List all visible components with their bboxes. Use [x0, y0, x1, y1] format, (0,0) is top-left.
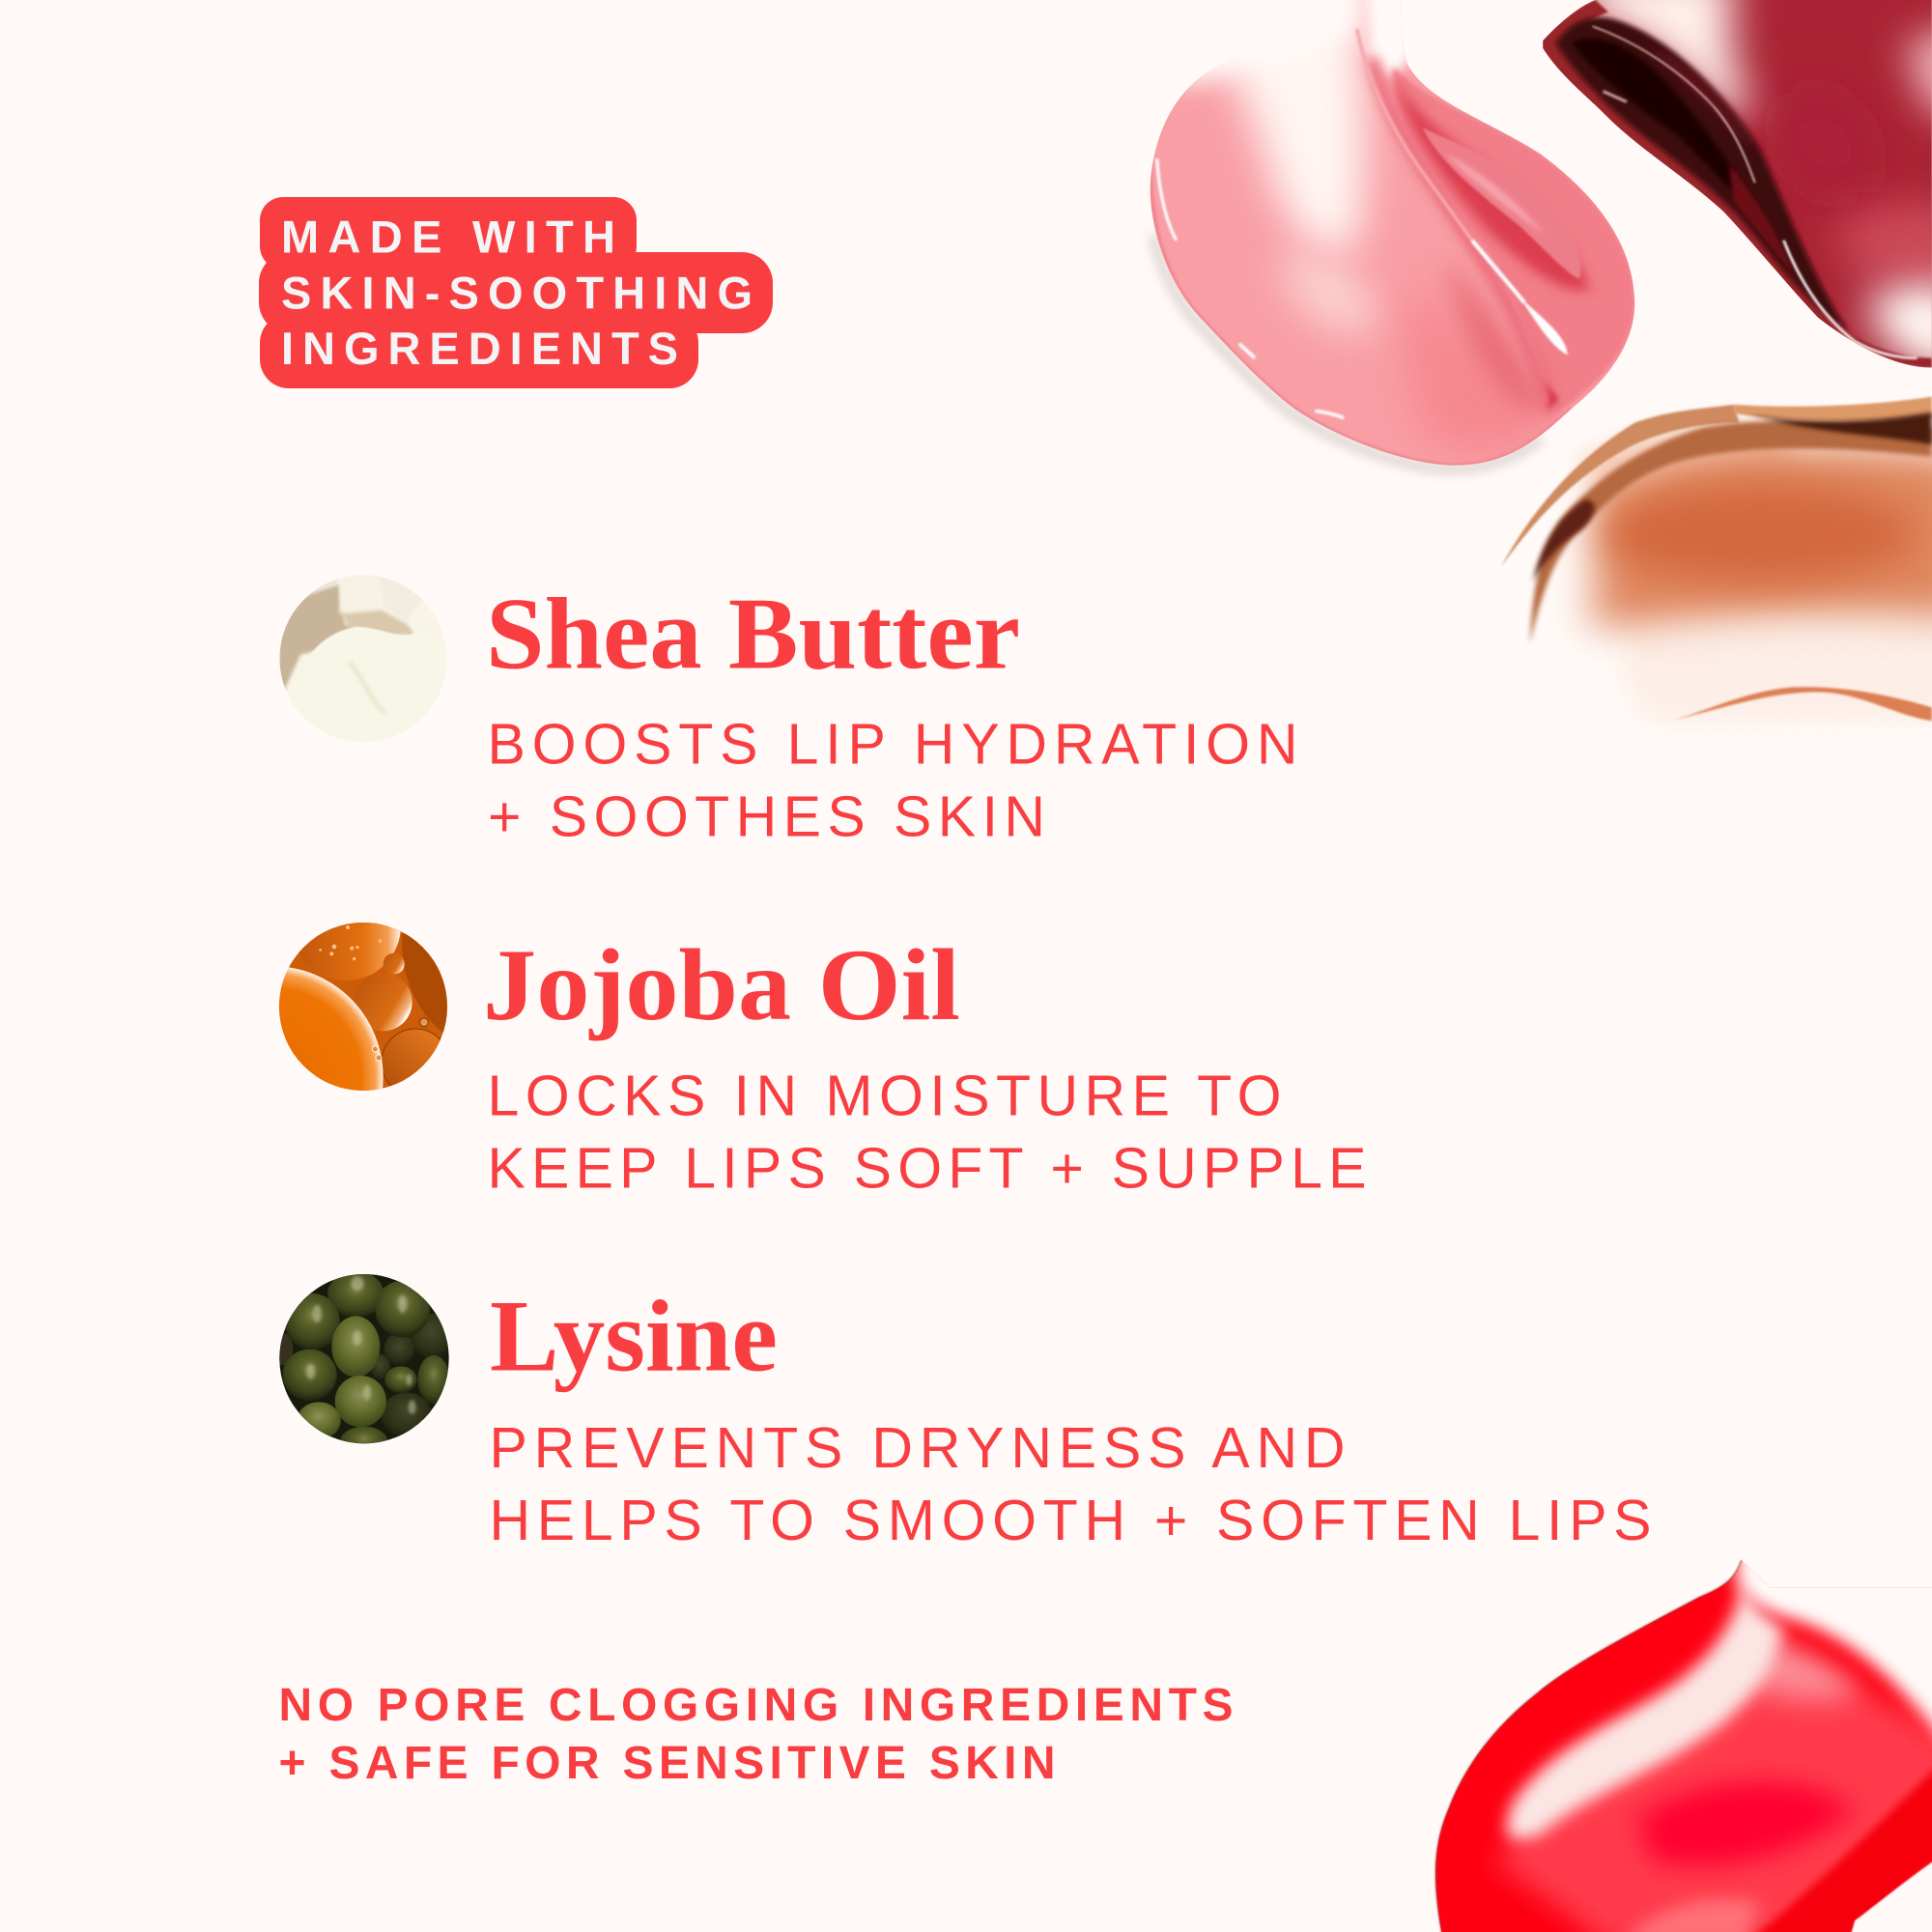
heading: lysine: Lysine	[490, 1279, 778, 1393]
footer note	[278, 1680, 1233, 1789]
description: lysine	[489, 1416, 1652, 1552]
icon: jojoba oil photo	[279, 923, 447, 1091]
heading: jojoba oil: Jojoba Oil	[483, 928, 960, 1041]
badge text: INGREDIENTS	[281, 323, 678, 374]
description: shea butter: + SOOTHES SKIN	[488, 784, 1045, 848]
badge text: MADE WITH	[281, 211, 615, 263]
badge text: SKIN-SOOTHING	[281, 267, 753, 319]
description: lysine: PREVENTS DRYNESS AND	[489, 1416, 1345, 1480]
description: shea butter	[487, 713, 1298, 848]
description: jojoba oil: LOCKS IN MOISTURE TO	[487, 1065, 1281, 1128]
description: shea butter: BOOSTS LIP HYDRATION	[487, 713, 1298, 777]
footer note: NO PORE CLOGGING INGREDIENTS	[278, 1680, 1233, 1731]
swatch: red balm	[1434, 1559, 1932, 1932]
swatch: pink balm	[1146, 0, 1634, 478]
swatch: dark berry balm	[1530, 0, 1932, 384]
swatch: terracotta balm	[1501, 396, 1932, 724]
icon: lysine fruit photo	[279, 1274, 449, 1443]
ingredient: lysine	[273, 1271, 1651, 1552]
heading: shea butter: Shea Butter	[486, 578, 1020, 690]
ingredient: shea butter	[278, 569, 1297, 848]
description: jojoba oil	[487, 1065, 1366, 1200]
footer note: + SAFE FOR SENSITIVE SKIN	[278, 1738, 1055, 1789]
badge text	[281, 211, 753, 374]
icon: shea butter photo	[278, 569, 452, 747]
badge: made with skin-soothing ingredients	[259, 197, 773, 388]
ingredient: jojoba oil	[279, 923, 1364, 1188]
description: lysine: HELPS TO SMOOTH + SOFTEN LIPS	[489, 1489, 1652, 1552]
description: jojoba oil: KEEP LIPS SOFT + SUPPLE	[487, 1136, 1366, 1200]
badge background	[259, 197, 773, 388]
